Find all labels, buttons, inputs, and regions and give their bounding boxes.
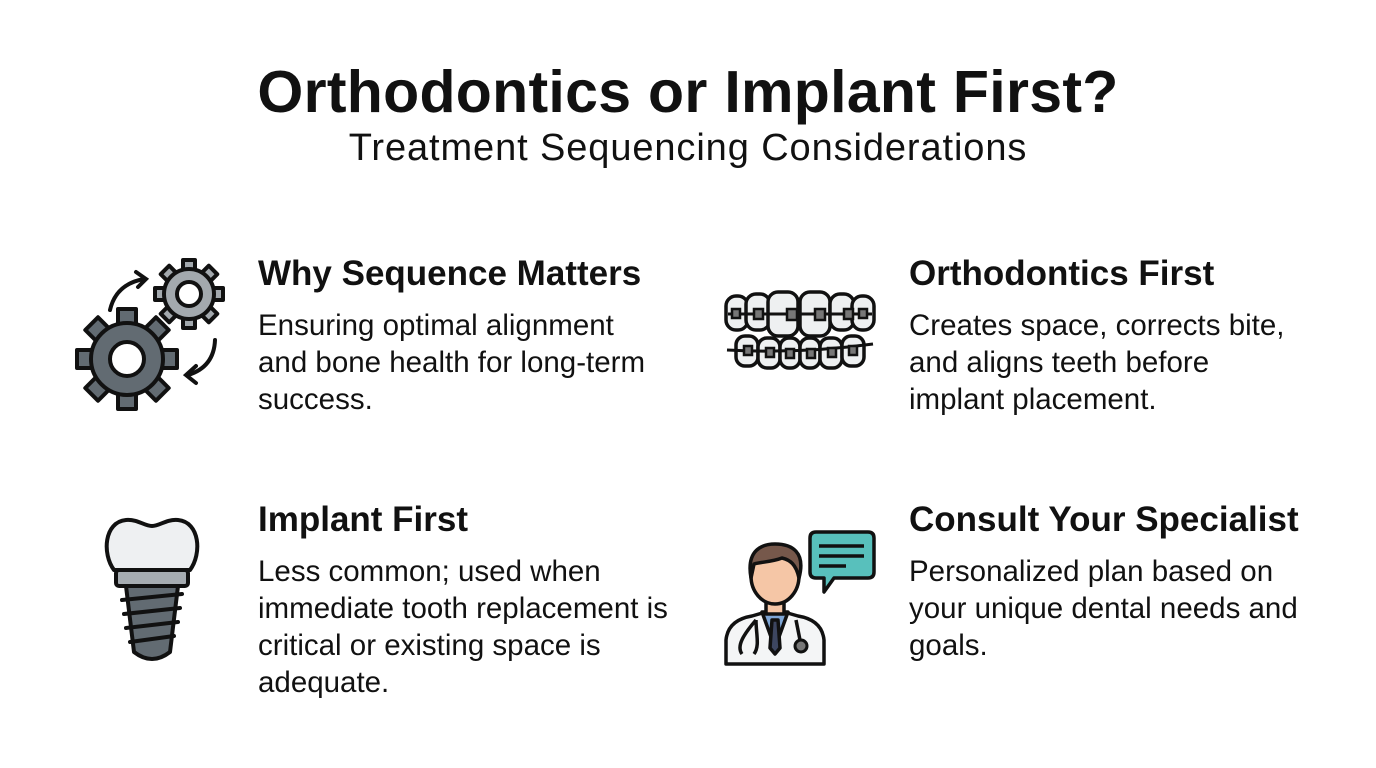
panel: why sequence matters bbox=[258, 254, 645, 416]
text bbox=[258, 555, 668, 699]
icon: implant bbox=[104, 518, 200, 661]
heading: Orthodontics First bbox=[909, 254, 1214, 293]
icon: braces bbox=[724, 290, 876, 370]
text: goals. bbox=[909, 629, 988, 662]
text: adequate. bbox=[258, 666, 389, 699]
text: Personalized plan based on bbox=[909, 555, 1273, 588]
heading: Implant First bbox=[258, 500, 468, 539]
title: Orthodontics or Implant First? bbox=[257, 59, 1119, 125]
text: critical or existing space is bbox=[258, 629, 601, 662]
text: and aligns teeth before bbox=[909, 346, 1209, 379]
text: Ensuring optimal alignment bbox=[258, 309, 614, 342]
text: success. bbox=[258, 383, 373, 416]
subtitle: Treatment Sequencing Considerations bbox=[349, 127, 1027, 169]
heading: Why Sequence Matters bbox=[258, 254, 641, 293]
icon: doctor consult bbox=[724, 530, 876, 666]
text bbox=[258, 309, 645, 416]
text: implant placement. bbox=[909, 383, 1157, 416]
text bbox=[909, 309, 1284, 416]
text: your unique dental needs and bbox=[909, 592, 1298, 625]
panel: implant first bbox=[258, 500, 668, 699]
text: Less common; used when bbox=[258, 555, 601, 588]
text: Creates space, corrects bite, bbox=[909, 309, 1284, 342]
heading: Consult Your Specialist bbox=[909, 500, 1299, 539]
icon: gears bbox=[75, 258, 225, 411]
text bbox=[909, 555, 1298, 662]
text: immediate tooth replacement is bbox=[258, 592, 668, 625]
panel: consult your specialist bbox=[909, 500, 1299, 662]
text: and bone health for long-term bbox=[258, 346, 645, 379]
panel: orthodontics first bbox=[909, 254, 1284, 416]
